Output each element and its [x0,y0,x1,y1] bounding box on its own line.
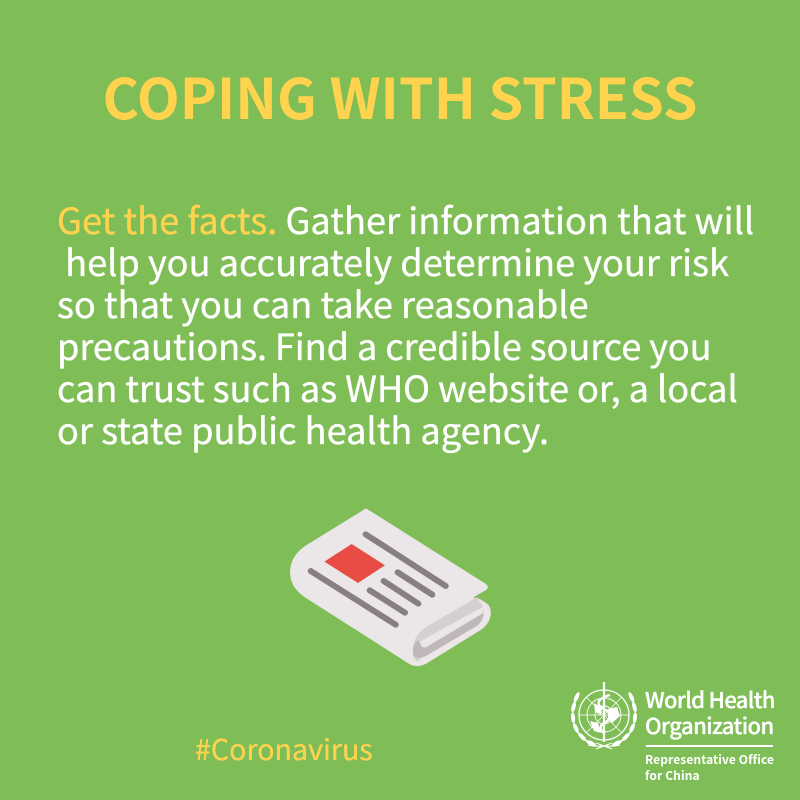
office name: Representative Office [645,751,774,768]
text block: get the facts: precautions. Find a credible source you [57,319,712,371]
logo rule [646,745,773,746]
organization name, second line: Organization [645,709,774,741]
office location: for China [645,767,700,784]
text block: get the facts: so that you can take reasonable [57,277,589,329]
organization name: World Health [645,683,775,715]
text block: get the facts: or state public health agency. [57,403,549,455]
logo: World Health Organization [571,682,775,784]
icon: WHO emblem [571,682,637,750]
icon: newspaper [290,508,491,666]
title: COPING WITH STRESS [103,55,697,136]
text block: get the facts [57,193,754,455]
hashtag: #Coronavirus [195,728,373,769]
text block: get the facts: help you accurately determine your risk [65,235,729,287]
text block: get the facts: Get the facts. Gather information that will [57,193,754,245]
text block: get the facts: can trust such as WHO website or, a local [57,361,738,413]
